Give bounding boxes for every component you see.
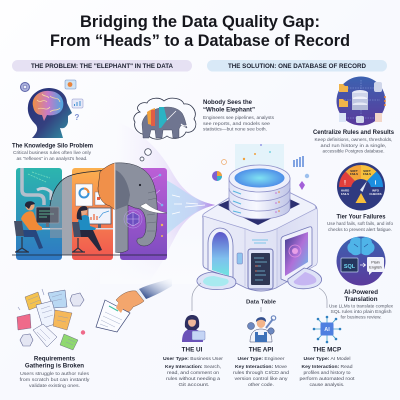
text: tier your failures: checks to prevent alert fatigue. xyxy=(328,227,392,232)
illustration: elephant across the panels xyxy=(12,163,167,260)
icon: tiered failures gauge: i xyxy=(375,180,377,186)
access point: the API: THE API xyxy=(249,346,274,354)
text: knowledge silo problem xyxy=(12,142,93,161)
title: Bridging the Data Quality Gap: xyxy=(80,13,320,31)
panel: engineer with pipelines xyxy=(14,168,62,260)
text: requirements gathering is broken: Gathering is Broken xyxy=(25,362,84,370)
section header: the problem: THE PROBLEM: THE "ELEPHANT" IN THE DATA xyxy=(31,64,174,70)
icon: AI chip network: AI xyxy=(324,327,330,333)
text: requirements gathering is broken xyxy=(20,356,90,388)
text: centralize rules and results: Keep definitions, owners, thresholds, xyxy=(314,137,392,142)
access point: the UI: read, and comment on xyxy=(167,370,220,375)
text: requirements gathering is broken: Requirements xyxy=(34,356,76,362)
illustration: database building xyxy=(197,144,322,291)
access point: the MCP: User Type: AI Model xyxy=(304,356,350,361)
text: requirements gathering is broken: from scratch but can instantly xyxy=(20,377,90,382)
title xyxy=(50,13,350,50)
icon: tiered failures gauge: SOFT xyxy=(350,169,358,173)
icon: SQL to plain English translation: SQL xyxy=(344,264,356,270)
access point: the MCP: profiles and history to xyxy=(304,370,351,375)
access point: the MCP xyxy=(300,316,355,387)
text: knowledge silo problem: The Knowledge Silo Problem xyxy=(12,142,93,150)
icon: scattered sticky notes and papers xyxy=(17,289,85,350)
icon: tiered failures gauge: FAILS xyxy=(350,172,358,176)
panel: data scientist purple xyxy=(120,168,167,260)
text: nobody sees the whole elephant: statistics—but none see both. xyxy=(203,126,267,132)
section header: the solution: THE SOLUTION: ONE DATABASE OF RECORD xyxy=(228,64,367,70)
illustration: hand holding a document xyxy=(96,278,172,332)
text: centralize rules and results: accessible Postgres database. xyxy=(322,148,384,154)
access point: the UI: rules without needing a xyxy=(166,376,221,381)
icon: head with brain xyxy=(20,80,83,138)
access point: the API: Key Interaction: Move xyxy=(235,364,288,369)
access point: the API: other code. xyxy=(248,382,274,387)
access point: the UI: User Type: Business User xyxy=(163,356,224,361)
text: AI-powered translation: AI-Powered xyxy=(344,289,378,296)
text: AI-powered translation: for business review. xyxy=(340,314,382,320)
text: AI-powered translation: SQL rules into plain English xyxy=(330,309,392,314)
connector: curved lines to access points xyxy=(192,283,327,312)
icon: head with brain: ? xyxy=(75,113,80,122)
access point: the UI xyxy=(163,315,224,387)
text: AI-powered translation: Use LLMs to translate complex xyxy=(329,304,394,308)
text: tier your failures: Tier Your Failures xyxy=(336,214,386,220)
text: knowledge silo problem: Critical business rules often live only xyxy=(13,150,92,155)
access point: the API: rules through CI/CD and xyxy=(233,370,290,375)
section header: the problem xyxy=(12,60,192,72)
access point: the MCP: cause analysis. xyxy=(310,382,344,387)
icon: tiered failures gauge: SOFT xyxy=(363,169,371,173)
text: nobody sees the whole elephant: Nobody Sees the xyxy=(203,100,253,106)
text: tier your failures: Use hard fails, soft fails, and info xyxy=(327,221,393,226)
access point: the UI: Git account. xyxy=(178,382,210,387)
flow swoosh from elephant to database xyxy=(100,120,220,284)
access point: the API: version control like any xyxy=(234,376,288,381)
icon: centralize database hub xyxy=(336,76,386,126)
panel: analyst with reports xyxy=(72,168,113,260)
text: centralize rules and results xyxy=(313,129,395,154)
access point: the UI: Key Interaction: Search, xyxy=(165,364,221,369)
label: data table: Data Table xyxy=(246,300,277,306)
text: AI-powered translation: Translation xyxy=(344,296,378,303)
text: nobody sees the whole elephant: Engineers see pipelines, analysts xyxy=(203,115,275,120)
icon: tiered failures gauge: FAILS xyxy=(341,192,349,196)
text: AI-powered translation xyxy=(329,289,394,320)
access point: the MCP: perform automated root xyxy=(300,376,355,381)
thought bubble with elephant xyxy=(134,98,196,161)
section header: the solution xyxy=(207,60,387,72)
text: requirements gathering is broken: Users struggle to author rules xyxy=(20,371,90,376)
access point: the UI: THE UI xyxy=(182,346,203,354)
title: From “Heads” to a Database of Record xyxy=(50,32,350,50)
text: knowledge silo problem: as "reflexes" in an analyst's head. xyxy=(16,156,88,161)
access point: the API xyxy=(233,316,290,387)
icon: tiered failures gauge: INFO xyxy=(372,188,380,192)
text: centralize rules and results: and run history in a single, xyxy=(320,143,386,148)
access point: the API: User Type: Engineer xyxy=(238,356,285,361)
text: tier your failures xyxy=(327,214,393,232)
text: requirements gathering is broken: validate existing ones. xyxy=(29,383,80,388)
icon: tiered failures gauge: CHECKS xyxy=(369,192,382,196)
icon: tiered failures gauge: HARD xyxy=(341,188,349,192)
text: nobody sees the whole elephant xyxy=(203,100,275,132)
access point: the MCP: Key Interaction: Read xyxy=(302,364,353,369)
icon: tiered failures gauge xyxy=(337,162,385,210)
icon: SQL to plain English translation: English xyxy=(369,266,382,270)
access point: the MCP: THE MCP xyxy=(313,346,341,354)
icon: tiered failures gauge: ! xyxy=(344,180,346,186)
icon: engineer with wrench and gears xyxy=(248,316,276,342)
text: centralize rules and results: Centralize Rules and Results xyxy=(313,129,395,136)
icon: tiered failures gauge: FAILS xyxy=(363,172,371,176)
text: nobody sees the whole elephant: “Whole Elephant” xyxy=(203,108,255,114)
icon: SQL to plain English translation xyxy=(336,236,386,286)
icon: SQL to plain English translation: Plain xyxy=(371,260,380,264)
text: nobody sees the whole elephant: see reports, and models see xyxy=(203,121,271,126)
icon: business user xyxy=(182,315,205,342)
